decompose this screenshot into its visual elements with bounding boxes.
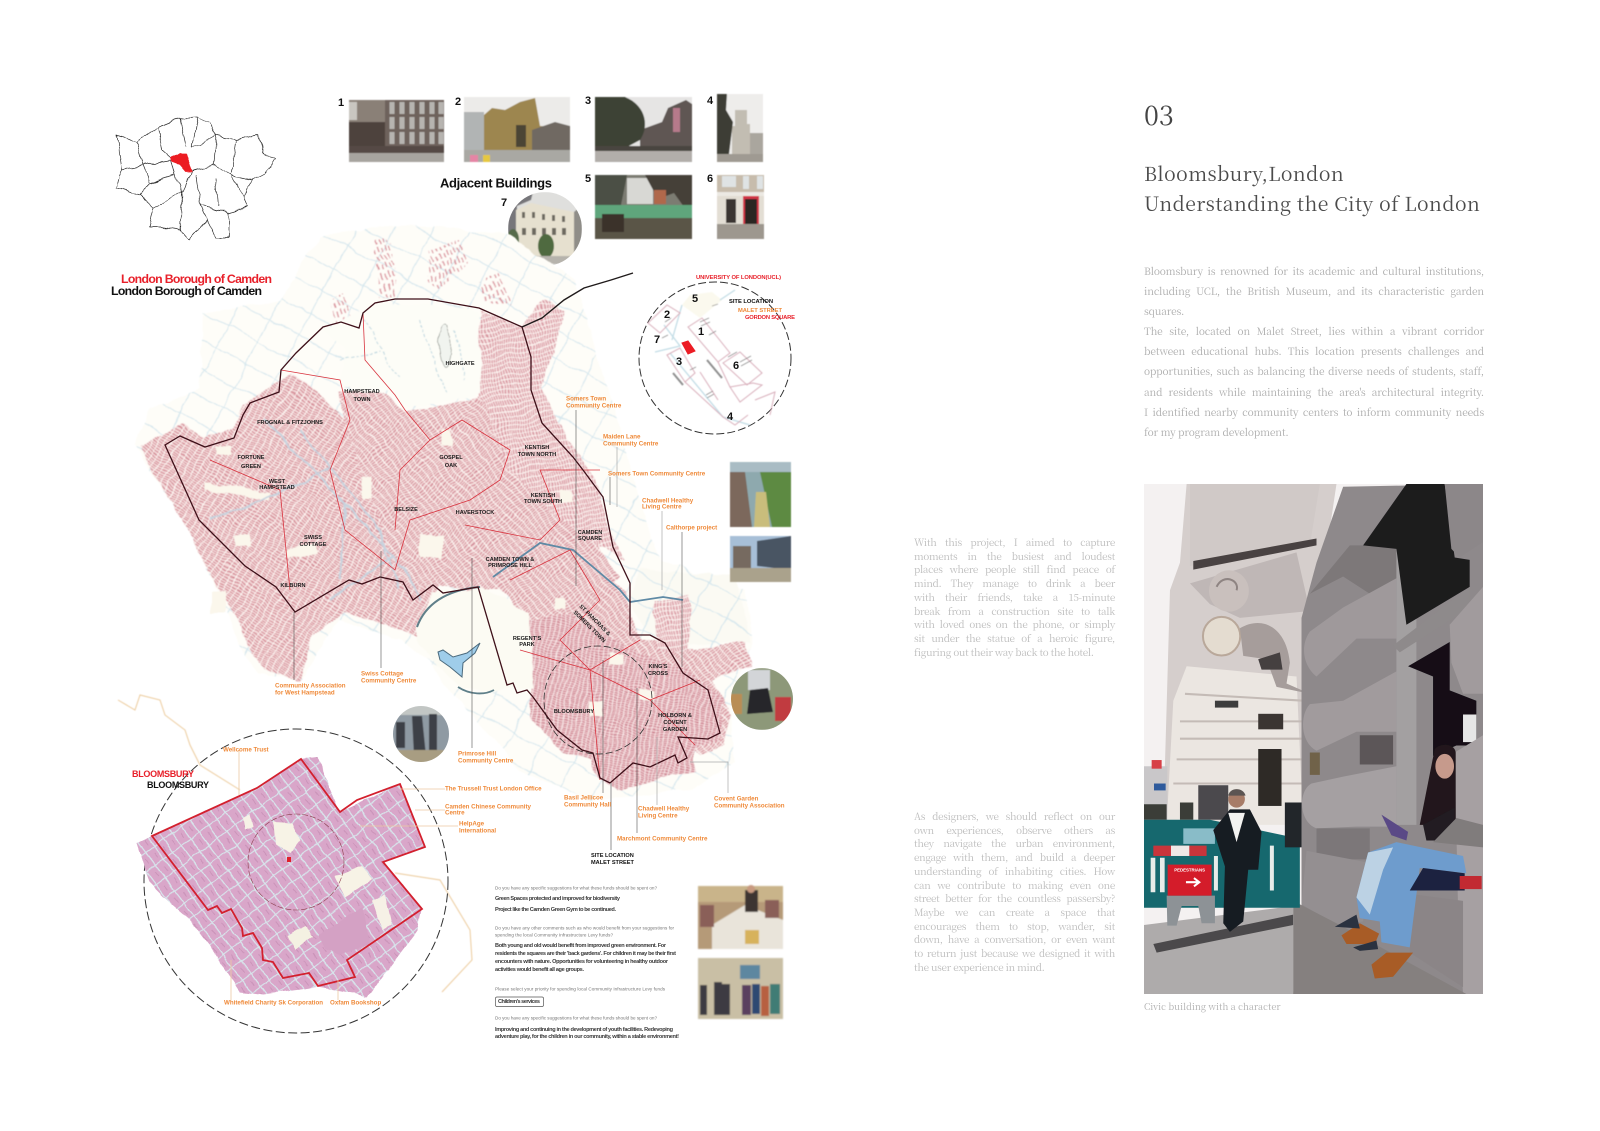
ward name labels: FORTUNE <box>237 455 265 461</box>
community centre labels: Centre <box>445 810 465 816</box>
pavement and plinth <box>1144 906 1293 994</box>
rustication lobes <box>1304 578 1396 677</box>
ward name labels: HOLBORN & <box>658 713 692 719</box>
pedestrian sign <box>1168 865 1212 896</box>
community centre labels: Maiden Lane <box>603 434 641 440</box>
photo 1: brick college building: 1 <box>338 97 344 109</box>
ward name labels: SWISS <box>304 535 322 541</box>
heading: adjacent buildings: Adjacent Buildings <box>440 176 552 190</box>
body text: site description: and residents while maintaining the area's architectural integrity. <box>1144 384 1484 399</box>
photo 2: gothic church <box>455 96 570 162</box>
community centre labels: International <box>459 828 496 834</box>
site plan circle <box>639 275 795 434</box>
community centre labels <box>275 396 785 866</box>
photo 7: circular crop of white building: 7 <box>501 197 507 209</box>
photo 4: university tower <box>707 94 763 162</box>
body text: site description: Bloomsbury is renowned for its academic and cultural institutions, <box>1144 263 1484 278</box>
pale open spaces in the wards <box>205 428 654 716</box>
text block: designer reflection: can we contribute to making even one <box>914 878 1115 892</box>
text block: project aim: with their friends, take a 15-minute <box>914 590 1115 604</box>
community centre labels: Camden Chinese Community <box>445 804 532 810</box>
west wards <box>140 375 440 680</box>
Bloomsbury detail map: Whitefield Charity Sk Corporation <box>224 1000 323 1006</box>
ward name labels: GOSPEL <box>439 455 463 461</box>
text block: project aim: mind. They manage to drink a beer <box>914 576 1115 590</box>
priority selection box <box>496 997 544 1006</box>
map title: London Borough of Camden <box>111 272 272 298</box>
community survey responses: encounters with nature. Opportunities for volunteering in healthy outdoor <box>495 959 669 965</box>
project photos beside map <box>392 462 794 763</box>
community photo: group portrait <box>698 958 783 1019</box>
circular photo: volunteers gardening <box>730 668 794 730</box>
community centre labels: Calthorpe project <box>666 524 717 532</box>
ward name labels: HAMPSTEAD <box>259 485 295 491</box>
text block: project aim: With this project, I aimed to capture <box>914 535 1115 549</box>
text block: project aim: with loved ones on the phone, or simply <box>914 617 1115 631</box>
body text: site description: squares. <box>1144 303 1184 318</box>
Bloomsbury detail map: Oxfam Bookshop <box>330 1000 381 1006</box>
section title: Understanding the City of London <box>1144 189 1480 217</box>
text block: designer reflection <box>914 809 1116 974</box>
ward name labels: KENTISH <box>525 445 549 451</box>
community centre labels: Chadwell Healthy <box>642 498 694 504</box>
site plan circle: 3 <box>676 356 682 368</box>
dark recess lower <box>1408 642 1476 756</box>
site plan circle: SITE LOCATION <box>729 299 773 305</box>
dark recess upper <box>1363 484 1470 625</box>
woman sitting <box>1420 745 1456 825</box>
section number: 03 <box>1144 94 1174 133</box>
ward name labels: COTTAGE <box>300 542 327 548</box>
Bloomsbury detail map: Wellcome Trust <box>223 746 269 754</box>
text block: designer reflection: Maybe we can create a space that <box>914 905 1115 919</box>
photo 5: garden square: 5 <box>585 173 591 185</box>
photo 4: university tower: 4 <box>707 95 714 107</box>
text block: project aim: places where people still find peace of <box>914 562 1115 576</box>
Bloomsbury detail map: BLOOMSBURY <box>132 769 194 779</box>
text block: designer reflection: down, have a conversation, or even want <box>914 932 1115 946</box>
ward name labels: TOWN NORTH <box>518 452 556 458</box>
community survey responses: activities would benefit all age groups. <box>495 967 584 973</box>
community centre labels: MALET STREET <box>591 860 634 866</box>
community survey responses: Project like the Camden Green Gym to be continued. <box>495 907 616 913</box>
Bloomsbury detail map <box>118 695 472 1033</box>
community survey responses: Improving and continuing in the development of youth facilities. Redevoping <box>495 1027 674 1033</box>
site range circle on main map <box>544 646 652 754</box>
photo 7: circular crop of white building <box>501 192 582 266</box>
community survey responses: spending the local Community Infrastructure Levy funds? <box>495 932 613 938</box>
ward name labels: REGENT'S <box>513 636 541 642</box>
section title: Bloomsbury,London <box>1144 159 1344 187</box>
body text: site description: I identified nearby community centers to inform community needs <box>1144 404 1484 419</box>
ward name labels: KENTISH <box>531 493 555 499</box>
community centre labels: Basil Jellicoe <box>564 794 604 802</box>
community centre labels: HelpAge <box>459 820 485 828</box>
priority selection box: Children's services <box>498 999 540 1005</box>
right columns <box>1445 484 1483 557</box>
photo 6: shop front with red door: 6 <box>707 173 713 185</box>
community centre labels: Somers Town Community Centre <box>608 470 706 478</box>
site marker <box>682 341 695 354</box>
circular photo: yoga class <box>392 705 450 763</box>
man walking <box>1213 809 1262 932</box>
map title: London Borough of Camden: London Borough of Camden <box>121 272 272 286</box>
text block: designer reflection: to return just because we designed it with <box>914 946 1115 960</box>
ward name labels: GREEN <box>241 464 261 470</box>
map title: London Borough of Camden: London Borough of Camden <box>111 284 262 298</box>
central wards <box>338 392 620 600</box>
ward name labels: HIGHGATE <box>445 361 475 367</box>
body text: site description: opportunities, such as balancing the diverse needs of students, staff, <box>1144 363 1484 378</box>
Somers Town and east <box>495 545 750 755</box>
community centre labels: for West Hampstead <box>275 690 335 696</box>
text block: project aim: break from a construction site to talk <box>914 604 1115 618</box>
photo 3: trees and tall building: 3 <box>585 95 591 107</box>
text block: designer reflection: engage with them, and build a deeper <box>914 850 1115 864</box>
ward name labels: SQUARE <box>578 536 602 542</box>
stone wall <box>1293 484 1483 994</box>
aerial photo: green street <box>730 462 791 527</box>
ward name labels: HAMPSTEAD <box>344 389 380 395</box>
community centre labels: Community Centre <box>361 678 417 684</box>
borough street map of Camden <box>135 226 785 866</box>
Bloomsbury ward outline <box>152 759 425 986</box>
pale heath <box>323 303 482 408</box>
community centre labels: Community Centre <box>458 758 514 764</box>
ward name labels: KILBURN <box>280 583 306 589</box>
ward name labels: WEST <box>269 479 286 485</box>
community centre labels: Covent Garden <box>714 796 759 802</box>
ward name labels: PARK <box>519 642 535 648</box>
ward boundaries <box>210 313 700 780</box>
ward name labels: PRIMROSE HILL <box>488 563 532 569</box>
left facade <box>1163 484 1336 825</box>
locator highlight: Camden <box>171 153 192 171</box>
section title <box>1144 159 1480 217</box>
community survey responses <box>495 886 679 1040</box>
text block: designer reflection: As designers, we should reflect on our <box>914 809 1115 823</box>
body text: site description: The site, located on Malet Street, lies within a vibrant corridor <box>1144 323 1484 338</box>
ward name labels <box>237 361 692 733</box>
site plan circle: 5 <box>692 293 698 305</box>
community centre labels: Somers Town <box>566 396 606 402</box>
main photo: civic building and passers-by <box>1144 484 1483 994</box>
site plan circle: 2 <box>664 309 670 321</box>
photo 2: gothic church: 2 <box>455 96 461 108</box>
photo caption: Civic building with a character <box>1144 1000 1281 1013</box>
community centre labels: Living Centre <box>642 504 682 510</box>
ward name labels: GARDEN <box>663 727 687 733</box>
street view photo <box>730 536 791 582</box>
ward name labels: ST PANCRAS & <box>578 604 611 637</box>
ward name labels: CAMDEN <box>578 530 602 536</box>
community centre labels: Marchmont Community Centre <box>617 836 708 842</box>
community survey responses: residents the squares are their 'back gardens'. For children it may be their first <box>495 951 676 957</box>
ward name labels: TOWN SOUTH <box>524 499 562 505</box>
Regent's Park lake and canal <box>417 543 683 693</box>
text block: project aim: figuring out their way back to the hotel. <box>914 645 1094 659</box>
body text: site description: for my program development. <box>1144 424 1289 439</box>
site plan circle: 4 <box>727 411 734 423</box>
ward name labels: COVENT <box>663 720 687 726</box>
community survey responses: Both young and old would benefit from improved green environment. For <box>495 943 667 949</box>
community centre labels: The Trussell Trust London Office <box>445 786 542 792</box>
community centre labels: Community Association <box>275 682 346 690</box>
Regent's Park <box>417 587 532 693</box>
ward name labels: HAVERSTOCK <box>456 510 494 516</box>
text block: designer reflection: the user experience in mind. <box>914 960 1045 974</box>
pale squares <box>274 822 300 853</box>
ward name labels: SOMERS TOWN <box>572 610 606 644</box>
text block: project aim: sit under the statue of a heroic figure, <box>914 631 1115 645</box>
ward name labels: TOWN <box>354 397 370 403</box>
locator map: Greater London boroughs <box>116 117 276 240</box>
leader lines to community centres <box>294 410 728 850</box>
ward name labels: OAK <box>445 463 457 469</box>
site plan circle: MALET STREET <box>738 308 782 314</box>
ward name labels: FROGNAL & FITZJOHNS <box>257 420 323 426</box>
community centre labels: Swiss Cottage <box>361 670 404 678</box>
site plan circle: 7 <box>654 334 660 346</box>
community survey responses: Green Spaces protected and improved for biodiversity <box>495 896 621 902</box>
community centre labels: Primrose Hill <box>458 750 496 758</box>
community survey responses: Do you have any specific suggestions for what these funds should be spent on? <box>495 886 657 890</box>
site plan circle: 6 <box>733 360 739 372</box>
photo 6: shop front with red door <box>707 173 764 239</box>
ward name labels: KING'S <box>648 664 668 670</box>
text block: designer reflection: they navigate the urban environment, <box>914 836 1115 850</box>
boundary extension north-east <box>522 273 633 327</box>
photo 5: garden square <box>585 173 692 239</box>
community centre labels: Chadwell Healthy <box>638 806 690 812</box>
main photo: civic building and passers-by: PEDESTRIANS <box>1174 867 1205 872</box>
community survey responses: Please select your priority for spending local Community Infrastructure Levy funds <box>495 986 666 992</box>
community photo: workshop table <box>698 885 783 949</box>
community centre labels: Community Association <box>714 802 785 810</box>
site plan circle: UNIVERSITY OF LONDON(UCL) <box>696 275 781 281</box>
main roads in pale blue <box>210 420 420 600</box>
text block: designer reflection: encourages them to stop, wander, sit <box>914 919 1115 933</box>
text block: project aim <box>914 535 1116 659</box>
Bloomsbury detail map: BLOOMSBURY <box>147 780 209 790</box>
north east Highgate <box>480 300 625 560</box>
text block: designer reflection: understanding of inhabiting cities. How <box>914 864 1115 878</box>
ward name labels: BLOOMSBURY <box>554 709 594 715</box>
east fringe streets <box>630 570 750 645</box>
teal fence <box>1144 820 1300 908</box>
body text: site description: including UCL, the British Museum, and its characteristic garden <box>1144 283 1484 298</box>
photo 1: brick college building <box>338 97 444 162</box>
text block: project aim: moments in the busiest and loudest <box>914 549 1115 563</box>
body text: site description: between educational hubs. This location presents challenges and <box>1144 343 1484 358</box>
community survey responses: adventure play, for the children in our community, within a stable environment! <box>495 1034 679 1040</box>
body text: site description <box>1144 263 1484 439</box>
community centre labels: Community Centre <box>603 440 659 448</box>
photo 3: trees and tall building <box>585 95 692 162</box>
ward name labels: BELSIZE <box>394 507 418 513</box>
ward name labels: CAMDEN TOWN & <box>486 557 534 563</box>
community survey responses: Do you have any other comments such as who would benefit from your suggestions for <box>495 926 674 930</box>
Camden boundary <box>165 299 720 783</box>
text block: designer reflection: street better for the countless passersby? <box>914 891 1115 905</box>
community centre labels: SITE LOCATION <box>591 853 634 859</box>
site plan circle: GORDON SQUARE <box>745 315 795 321</box>
Bloomsbury, Holborn <box>528 615 722 790</box>
text block: designer reflection: own experiences, observe others as <box>914 823 1115 837</box>
community centre labels: Community Hall <box>564 802 611 808</box>
community survey responses: Do you have any specific suggestions for what these funds should be spent on? <box>495 1016 657 1020</box>
community centre labels: Community Centre <box>566 402 622 410</box>
community centre labels: Living Centre <box>638 812 678 820</box>
ward name labels: CROSS <box>648 671 668 677</box>
site plan circle: 1 <box>698 326 704 338</box>
